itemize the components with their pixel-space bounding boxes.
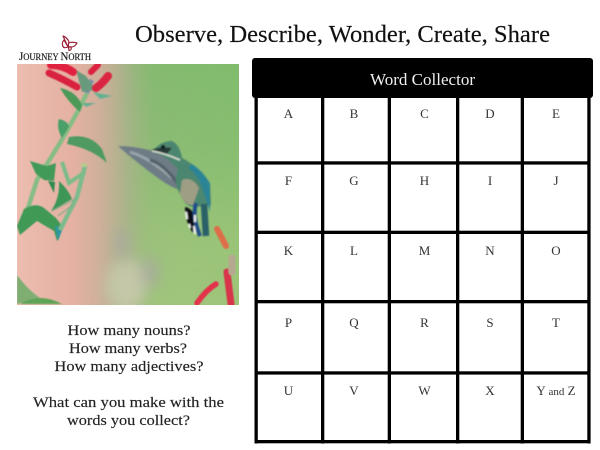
alphabet letters: T [552,315,560,330]
alphabet letters: U [284,383,294,398]
logo: Journey North [19,36,91,63]
alphabet letters: B [350,106,359,121]
text block: questions about word types [54,323,204,375]
alphabet letters: R [420,315,429,330]
blurred background flower [106,227,159,311]
logo wordmark: JOURNEY NORTH [19,51,91,63]
alphabet letters: X [485,383,495,398]
alphabet letters: F [285,173,292,188]
alphabet letters: S [486,315,494,330]
photo: hummingbird and red flowers [17,64,239,305]
alphabet letters: L [350,243,358,258]
hummingbird [118,141,211,236]
text block: questions about word types: How many adjectives? [54,359,204,375]
alphabet letters: N [485,243,495,258]
alphabet letters: K [284,243,294,258]
panel: word collector table [252,58,593,444]
text block: what can you make [33,395,224,429]
alphabet letters: G [349,173,359,188]
alphabet letters [284,106,576,398]
table grid [254,96,591,444]
alphabet letters: C [420,106,429,121]
flower stem and leaves [17,70,112,304]
alphabet letters: E [552,106,560,121]
alphabet letters: D [485,106,495,121]
alphabet letters: P [285,315,292,330]
alphabet letters: Q [349,315,359,330]
alphabet letters: I [488,173,492,188]
alphabet letters: J [553,173,559,188]
table header [252,58,593,98]
alphabet letters: V [349,383,359,398]
alphabet letters: A [284,106,294,121]
alphabet letters: H [420,173,429,188]
title: Observe, Describe, Wonder, Create, Share [135,22,550,48]
alphabet letters: Y and Z [536,383,576,398]
table header: Word Collector [370,70,475,89]
red flowers [49,65,232,304]
text block: what can you make: What can you make with the [33,395,224,411]
text block: questions about word types: How many nouns? [68,323,191,339]
icon: butterfly [62,36,77,50]
alphabet letters: O [551,243,561,258]
text block: what can you make: words you collect? [67,413,190,429]
alphabet letters: W [418,383,431,398]
text block: questions about word types: How many verbs? [69,341,187,357]
alphabet letters: M [419,243,431,258]
